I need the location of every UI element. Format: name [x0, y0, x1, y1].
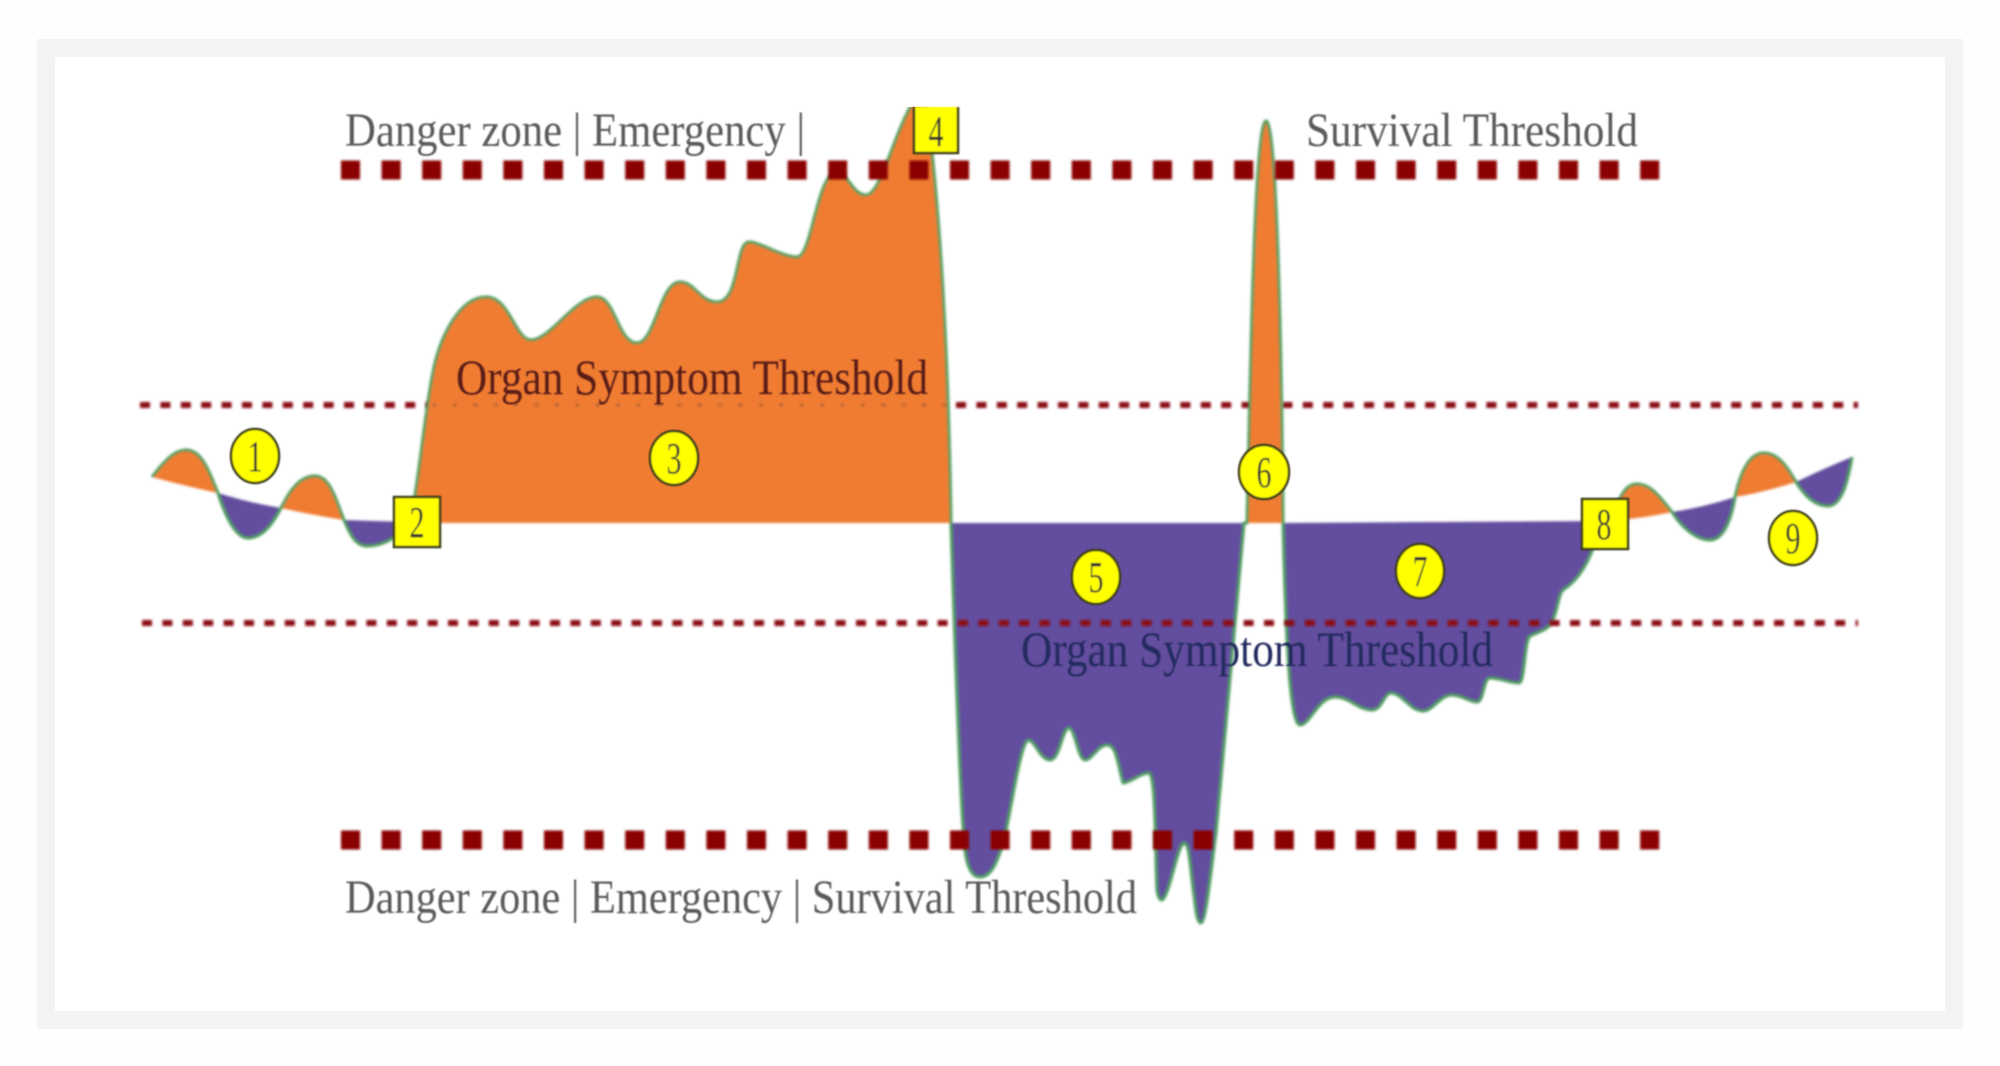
marker 6 [1239, 445, 1289, 499]
marker 2: 2 [410, 498, 424, 547]
marker 1 [231, 429, 279, 483]
marker 3 [650, 431, 698, 485]
upper danger zone square dotted line [341, 160, 1660, 180]
marker 9 [1769, 511, 1817, 565]
marker 3: 3 [666, 434, 682, 483]
marker 4 [914, 107, 958, 156]
chart: symptom wave diagram [138, 106, 1860, 926]
marker 7 [1396, 544, 1444, 598]
label: lower organ symptom threshold: Organ Symptom Threshold [1021, 621, 1493, 677]
marker 5: 5 [1088, 553, 1104, 602]
marker 6: 6 [1256, 448, 1272, 497]
marker 4: 4 [928, 107, 944, 156]
wave fills and outline [152, 95, 1852, 923]
numbered markers [231, 107, 1817, 604]
label: lower danger zone and survival threshold: Danger zone | Emergency | Survival Threshold [345, 871, 1137, 924]
lower organ symptom threshold dotted line [142, 620, 1858, 626]
faint threshold dots showing through orange [433, 404, 948, 406]
marker 9: 9 [1786, 514, 1800, 563]
marker 2 [394, 497, 440, 547]
label: upper organ symptom threshold: Organ Symptom Threshold [456, 349, 928, 405]
label: upper survival threshold: Survival Threshold [1306, 104, 1638, 157]
marker 8 [1582, 499, 1628, 549]
label: upper danger zone: Danger zone | Emergency | [345, 104, 805, 157]
green outline of the wave [152, 95, 1852, 923]
upper organ symptom threshold dotted line [140, 402, 1858, 408]
marker 1: 1 [248, 432, 262, 481]
marker 7: 7 [1412, 547, 1428, 596]
orange fill areas above baseline [152, 95, 1796, 523]
marker 8: 8 [1596, 500, 1612, 549]
purple fill areas below baseline [218, 457, 1852, 923]
marker 5 [1072, 550, 1120, 604]
lower danger zone square dotted line [341, 830, 1660, 850]
